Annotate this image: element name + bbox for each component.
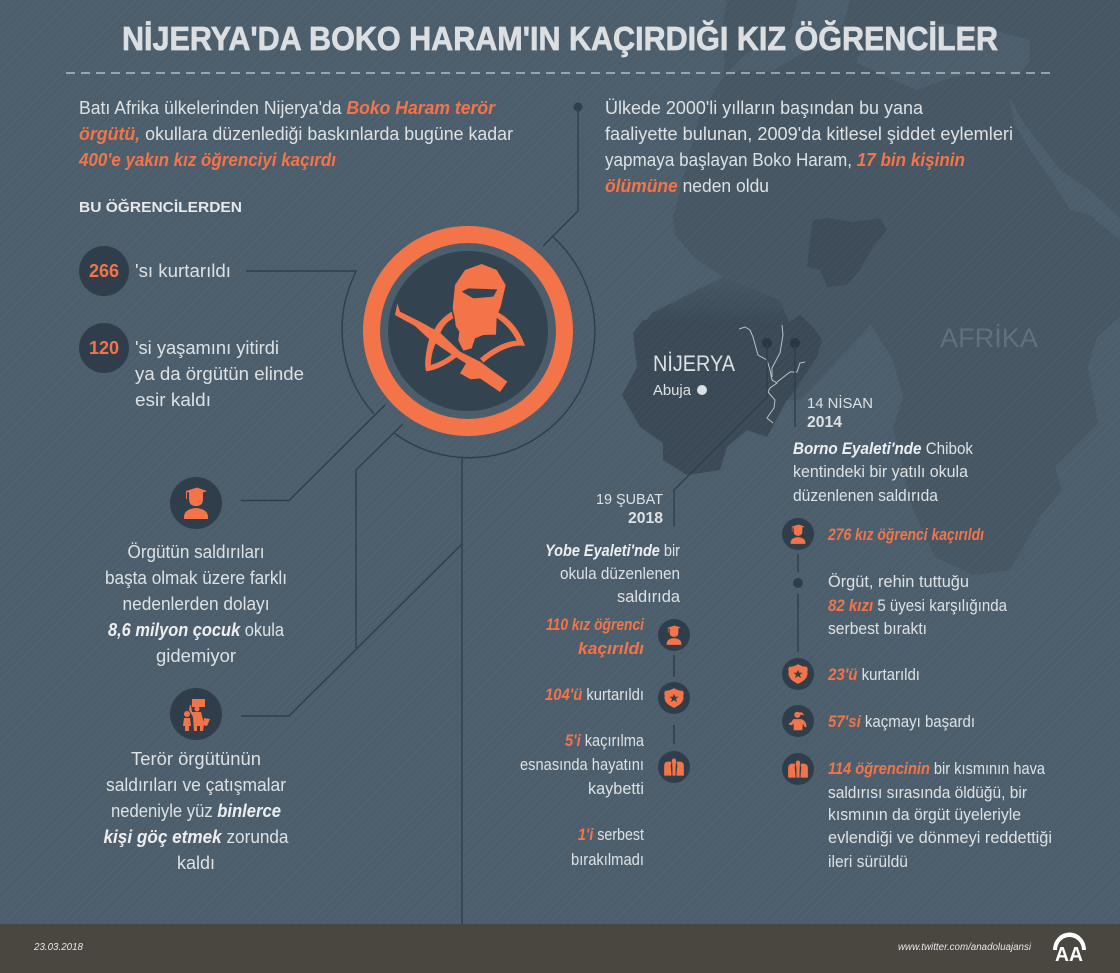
stat: 266 bbox=[79, 246, 231, 296]
text: 82 kızı: 82 kızı 5 üyesi karşılığında bbox=[828, 597, 1008, 615]
label: AFRİKA: AFRİKA bbox=[940, 322, 1038, 353]
logo: AA: AA bbox=[1055, 944, 1083, 966]
text: 114 öğrenci: saldırısı sırasında öldüğü, bir bbox=[828, 784, 1027, 802]
text block: Borno: düzenlenen saldırıda bbox=[793, 487, 939, 505]
stat: 5 hayatını kaybetti: 5'i kaçırılma bbox=[565, 732, 645, 750]
label: NİJERYA: NİJERYA bbox=[653, 351, 735, 376]
date: 19 şubat 2018: 19 ŞUBAT bbox=[596, 491, 663, 508]
timeline pins bbox=[674, 338, 800, 526]
map: Nigeria bbox=[622, 277, 822, 475]
text block: intro left: örgütü, okullara düzenlediği baskınlarda bugüne kadar bbox=[79, 124, 513, 144]
text: 114 öğrenci: 114 öğrencinin bir kısmının hava bbox=[828, 760, 1046, 778]
text block: Yobe bbox=[545, 542, 681, 606]
text: 82 kızı: serbest bıraktı bbox=[828, 620, 927, 638]
stat: 110 kaçırıldı: 110 kız öğrenci bbox=[546, 616, 644, 634]
map: Nigeria small bbox=[807, 218, 887, 287]
text block: Yobe: saldırıda bbox=[617, 588, 681, 606]
stat: 5 hayatını kaybetti: kaybetti bbox=[588, 780, 644, 798]
stat: 120: 120 bbox=[89, 338, 119, 358]
text block: intro left bbox=[78, 98, 513, 170]
stat: 23 kurtarıldı: 23'ü kurtarıldı bbox=[827, 666, 920, 684]
date: 19 şubat 2018 bbox=[596, 491, 663, 527]
stat: 1 serbest bırakılmadı bbox=[571, 826, 644, 869]
text block: intro right: ölümüne neden oldu bbox=[605, 176, 769, 196]
text block: göç: kaldı bbox=[177, 853, 215, 873]
text block: Borno bbox=[793, 440, 974, 505]
label: Abuja: Abuja bbox=[653, 382, 692, 399]
icon: graduate bbox=[170, 477, 222, 529]
text block: göç: Terör örgütünün bbox=[131, 749, 261, 769]
icon: militant with rifle bbox=[395, 264, 525, 392]
stat: 57 kaçtı: 57'si kaçmayı başardı bbox=[828, 713, 975, 731]
text block: intro right: yapmaya başlayan Boko Haram, 17 bin kişinin bbox=[605, 150, 965, 170]
text: 114 öğrenci: ileri sürüldü bbox=[828, 853, 908, 871]
stat: 120: 'si yaşamını yitirdi bbox=[135, 338, 279, 358]
stat: 110 kaçırıldı bbox=[546, 616, 690, 658]
icon: refugees bbox=[170, 688, 222, 740]
text block: Yobe: okula düzenlenen bbox=[560, 565, 680, 583]
map: Africa bbox=[640, 0, 1120, 575]
footer url: www.twitter.com/anadoluajansi bbox=[898, 942, 1032, 953]
text block: 8,6 milyon: başta olmak üzere farklı bbox=[105, 568, 287, 588]
stat: 120 bbox=[79, 323, 304, 410]
central emblem bbox=[363, 226, 573, 436]
stat: 5 hayatını kaybetti bbox=[520, 732, 645, 798]
stat: 110 kaçırıldı: kaçırıldı bbox=[578, 640, 644, 658]
timeline 2014 bbox=[782, 518, 1052, 871]
text block: Yobe: Yobe Eyaleti'nde bir bbox=[545, 542, 680, 560]
timeline 2018 bbox=[520, 616, 690, 869]
stat: 266: 'sı kurtarıldı bbox=[135, 261, 231, 281]
text block: göç bbox=[104, 749, 289, 873]
text block: intro right: faaliyette bulunan, 2009'da kitlesel şiddet eylemleri bbox=[605, 124, 1013, 144]
heading: bu öğrencilerden: BU ÖĞRENCİLERDEN bbox=[79, 198, 242, 216]
stat: 5 hayatını kaybetti: esnasında hayatını bbox=[520, 756, 644, 774]
footer date: 23.03.2018 bbox=[33, 942, 83, 953]
text block: intro right: Ülkede 2000'li yılların başından bu yana bbox=[605, 98, 924, 118]
date: 19 şubat 2018: 2018 bbox=[628, 510, 663, 527]
title: NİJERYA'DA BOKO HARAM'IN KAÇIRDIĞI KIZ ÖĞRENCİLER bbox=[122, 20, 998, 57]
stat: 120: esir kaldı bbox=[135, 390, 211, 410]
text block: göç: saldırıları ve çatışmalar bbox=[106, 775, 286, 795]
text: 82 kızı: Örgüt, rehin tuttuğu bbox=[828, 573, 969, 591]
text: 114 öğrenci: kısmının da örgüt üyeleriyle bbox=[828, 806, 1021, 824]
stat: 1 serbest bırakılmadı: bırakılmadı bbox=[571, 851, 644, 869]
date: 14 nisan 2014: 14 NİSAN bbox=[807, 394, 873, 412]
text block: Borno: kentindeki bir yatılı okula bbox=[793, 463, 969, 481]
stat: 1 serbest bırakılmadı: 1'i serbest bbox=[578, 826, 644, 844]
date: 14 nisan 2014 bbox=[807, 394, 873, 431]
text block: 8,6 milyon: nedenlerden dolayı bbox=[122, 594, 270, 614]
stat: 276 kaçırıldı: 276 kız öğrenci kaçırıldı bbox=[827, 526, 984, 544]
text block: göç: nedeniyle yüz binlerce bbox=[111, 801, 281, 821]
text block: 8,6 milyon: gidemiyor bbox=[156, 646, 236, 666]
text block: 8,6 milyon bbox=[105, 542, 287, 666]
footer bbox=[0, 924, 1120, 973]
stat: 104 kurtarıldı: 104'ü kurtarıldı bbox=[545, 686, 644, 704]
logo: AA bbox=[1053, 932, 1086, 966]
text block: 8,6 milyon: 8,6 milyon çocuk okula bbox=[108, 620, 285, 640]
text: 82 kızı bbox=[828, 573, 1008, 638]
stat: 120: ya da örgütün elinde bbox=[135, 364, 304, 384]
text block: intro left: 400'e yakın kız öğrenciyi kaçırdı bbox=[78, 150, 336, 170]
text block: Borno: Borno Eyaleti'nde Chibok bbox=[793, 440, 974, 458]
stat: 266: 266 bbox=[89, 261, 119, 281]
connector lines bbox=[241, 102, 595, 925]
text block: intro left: Batı Afrika ülkelerinden Nijerya'da Boko Haram terör bbox=[79, 98, 496, 118]
date: 14 nisan 2014: 2014 bbox=[807, 414, 842, 431]
text block: 8,6 milyon: Örgütün saldırıları bbox=[128, 542, 264, 562]
text: 114 öğrenci: evlendiği ve dönmeyi reddettiği bbox=[828, 829, 1052, 847]
text: 114 öğrenci bbox=[828, 760, 1052, 871]
text block: göç: kişi göç etmek zorunda bbox=[104, 827, 289, 847]
text block: intro right bbox=[605, 98, 1013, 196]
